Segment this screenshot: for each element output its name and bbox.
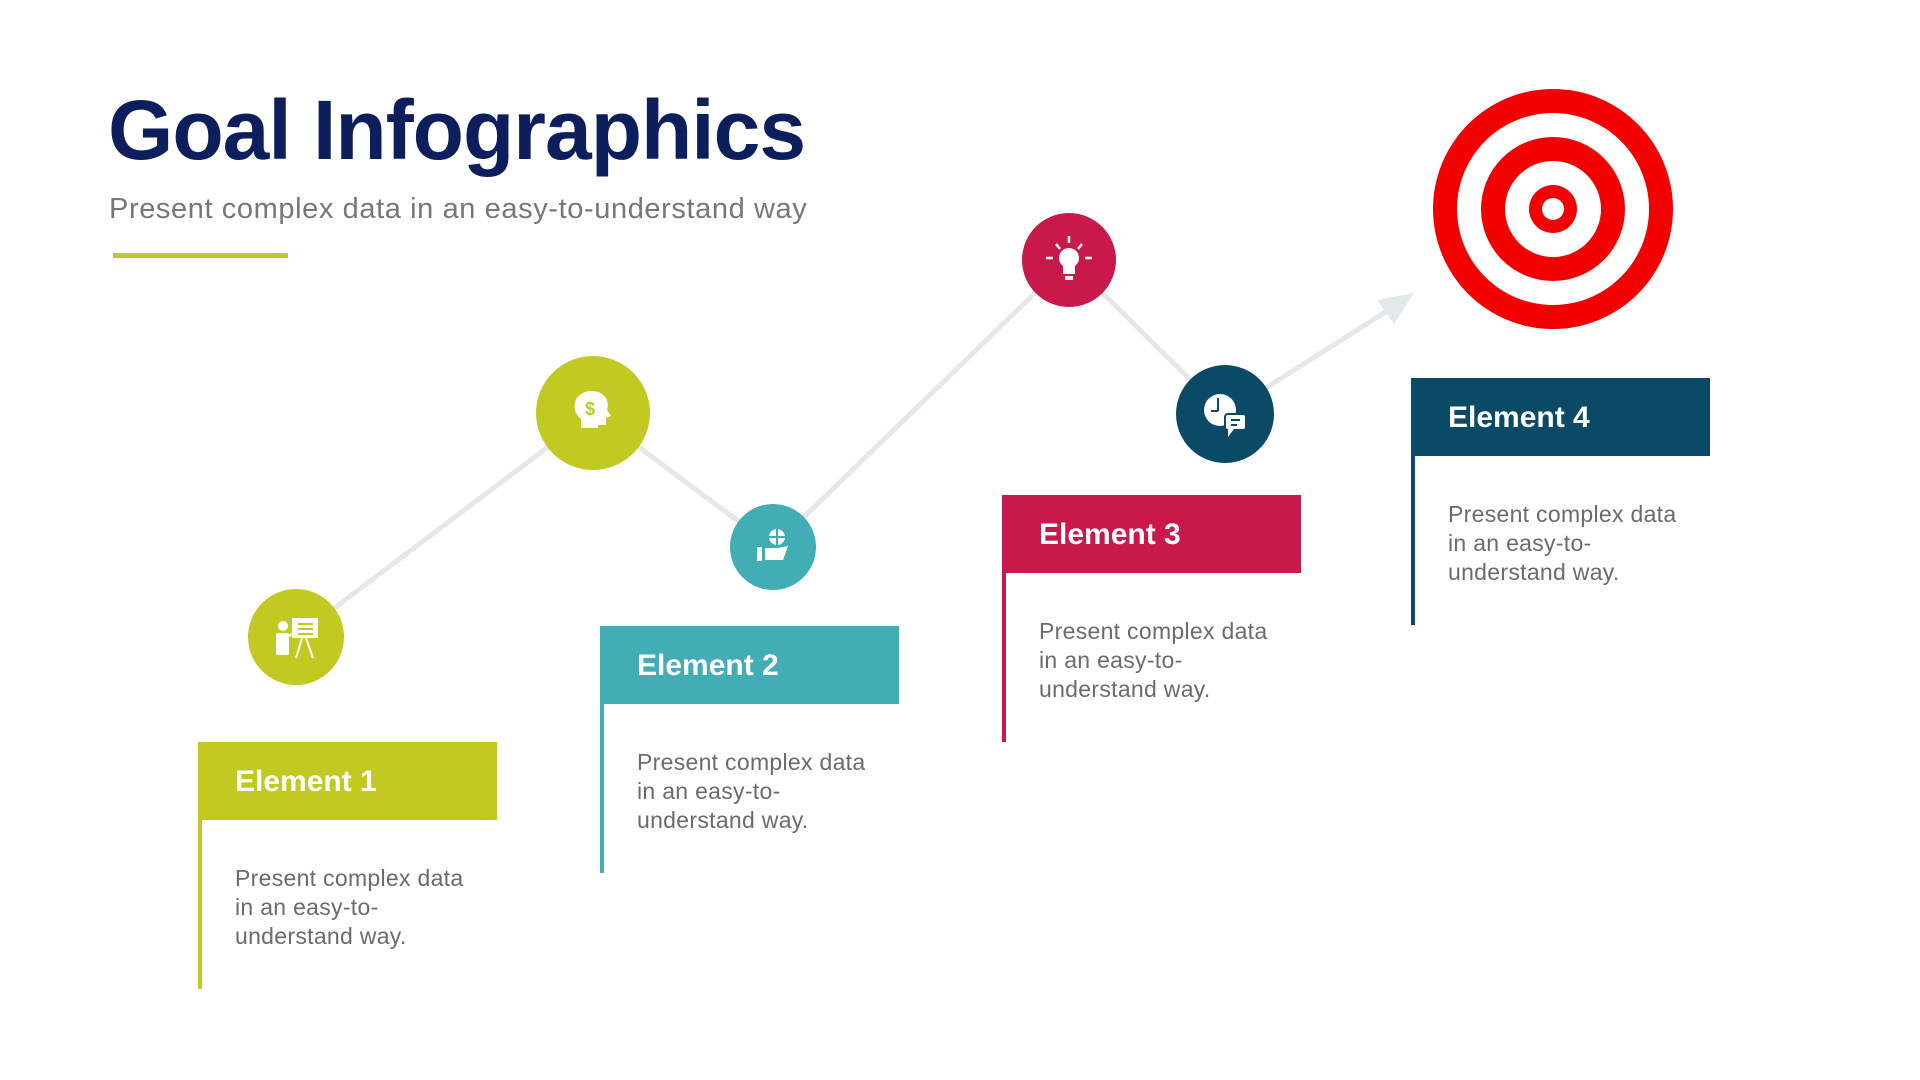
heading: Element 2: Element 2 (637, 649, 779, 682)
text: element 3 body: Present complex data (1039, 618, 1267, 644)
panel: element 4 (1411, 378, 1710, 625)
panel: element 2 (600, 626, 899, 873)
icon: light bulb (1022, 213, 1116, 307)
title underline (113, 253, 288, 258)
heading: Element 4: Element 4 (1448, 401, 1590, 434)
text: element 1 body: in an easy-to- (235, 894, 379, 920)
subtitle: Present complex data in an easy-to-understand way (109, 193, 807, 225)
text: element 4 body: in an easy-to- (1448, 530, 1592, 556)
icon: presenter (248, 589, 344, 685)
text: element 4 body: Present complex data (1448, 501, 1676, 527)
icon: clock and chat (1176, 365, 1274, 463)
text: element 4 body (1448, 501, 1676, 585)
icon: globe in hand (730, 504, 816, 590)
text: element 1 body (235, 865, 464, 949)
connecting line (296, 260, 1395, 637)
panel: element 3 (1002, 495, 1301, 742)
title: Goal Infographics (108, 83, 805, 177)
icon: target (1433, 89, 1673, 329)
icon: head with dollar (536, 356, 650, 470)
text: element 3 body: in an easy-to- (1039, 647, 1183, 673)
panel: element 1 (198, 742, 497, 989)
text: element 2 body: understand way. (637, 807, 809, 833)
text: element 1 body: understand way. (235, 923, 407, 949)
text: element 4 body: understand way. (1448, 559, 1620, 585)
heading: Element 3: Element 3 (1039, 518, 1181, 551)
icon: head with dollar: $ (585, 399, 595, 419)
text: element 3 body: understand way. (1039, 676, 1211, 702)
text: element 2 body (637, 749, 866, 833)
heading: Element 1: Element 1 (235, 765, 377, 798)
text: element 2 body: in an easy-to- (637, 778, 781, 804)
text: element 3 body (1039, 618, 1268, 702)
text: element 1 body: Present complex data (235, 865, 463, 891)
arrow head (1377, 293, 1414, 324)
text: element 2 body: Present complex data (637, 749, 865, 775)
heading: Element 3 (1002, 495, 1301, 573)
heading: Element 4 (1411, 378, 1710, 456)
heading: Element 2 (600, 626, 899, 704)
heading: Element 1 (198, 742, 497, 820)
